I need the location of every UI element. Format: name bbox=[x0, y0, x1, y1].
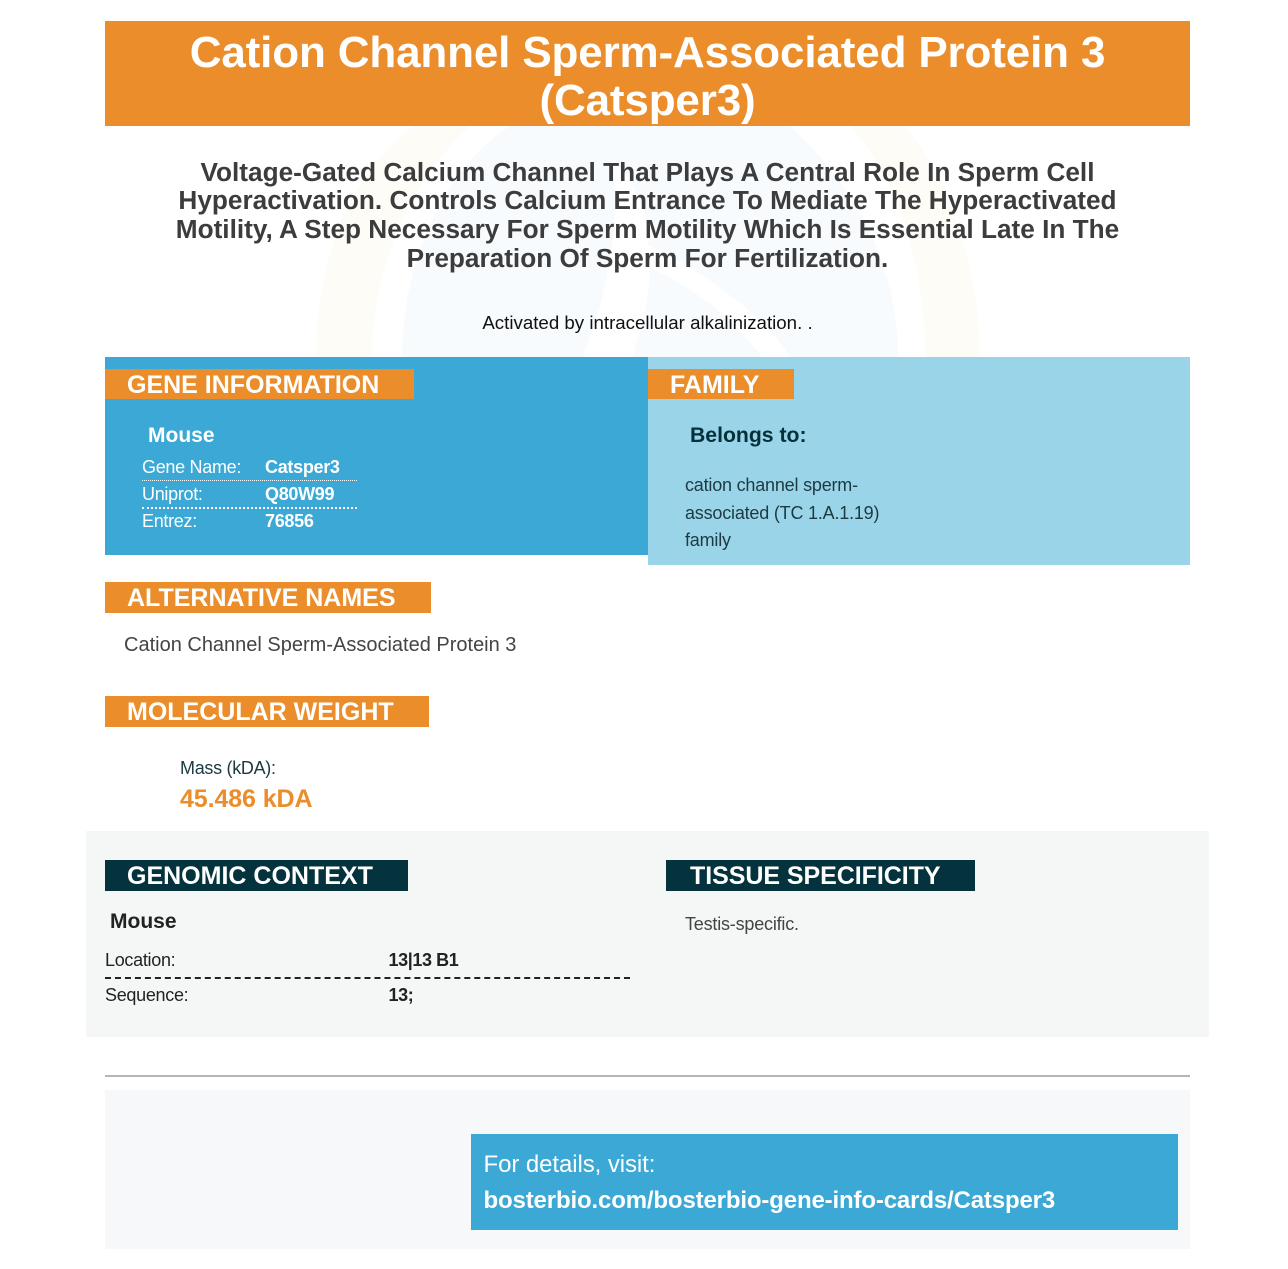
panel: gene information bbox=[105, 357, 648, 555]
genomic data table: Sequence: bbox=[105, 985, 188, 1005]
background watermark bbox=[0, 126, 1288, 357]
title banner: Cation Channel Sperm-Associated Protein 3 bbox=[190, 28, 1105, 76]
belongs to label: Belongs to: bbox=[690, 424, 807, 446]
subtitle description: Motility, A Step Necessary For Sperm Motility Which Is Essential Late In The bbox=[176, 214, 1119, 244]
gene data table: Catsper3 bbox=[265, 457, 340, 477]
heading: alternative names: ALTERNATIVE NAMES bbox=[127, 584, 396, 612]
panel: family bbox=[648, 357, 1190, 565]
title banner: (Catsper3) bbox=[539, 76, 756, 124]
panel: footer bbox=[105, 1090, 1190, 1249]
genomic data table: 13; bbox=[388, 985, 413, 1005]
gene data table: 76856 bbox=[265, 511, 314, 531]
family description: associated (TC 1.A.1.19) bbox=[685, 502, 879, 522]
subtitle description: Preparation Of Sperm For Fertilization. bbox=[407, 243, 888, 273]
genomic data table: Location: bbox=[105, 950, 175, 970]
family description: cation channel sperm- bbox=[685, 475, 858, 495]
mass label: Mass (kDA): bbox=[180, 758, 276, 778]
genomic data table bbox=[105, 950, 630, 1005]
genomic data table: 13|13 B1 bbox=[388, 950, 458, 970]
gene data table: Gene Name: bbox=[142, 457, 241, 477]
species label: Mouse bbox=[110, 910, 177, 932]
subtitle description bbox=[176, 157, 1119, 273]
heading: molecular weight: MOLECULAR WEIGHT bbox=[127, 698, 394, 726]
gene data table: Uniprot: bbox=[142, 484, 203, 504]
heading: gene information: GENE INFORMATION bbox=[127, 371, 379, 399]
family description: family bbox=[685, 530, 731, 550]
mass value: 45.486 kDA bbox=[180, 785, 312, 813]
callout: details link: bosterbio.com/bosterbio-gene-info-cards/Catsper3 bbox=[484, 1187, 1055, 1214]
title banner bbox=[105, 21, 1190, 126]
subtitle description: Voltage-Gated Calcium Channel That Plays A Central Role In Sperm Cell bbox=[201, 157, 1094, 187]
gene data table bbox=[142, 457, 357, 531]
tissue specificity text: Testis-specific. bbox=[685, 914, 799, 934]
callout: details link: For details, visit: bbox=[484, 1151, 655, 1178]
heading: tissue specificity: TISSUE SPECIFICITY bbox=[690, 862, 941, 890]
heading: family: FAMILY bbox=[670, 371, 759, 399]
species label: Mouse bbox=[148, 424, 215, 446]
alternative names text: Cation Channel Sperm-Associated Protein 3 bbox=[124, 634, 516, 656]
activation note: Activated by intracellular alkalinization. . bbox=[482, 312, 813, 333]
gene data table: Entrez: bbox=[142, 511, 197, 531]
heading: family bbox=[648, 369, 794, 399]
heading: genomic context: GENOMIC CONTEXT bbox=[127, 862, 373, 890]
panel: genomic context and tissue specificity bbox=[86, 831, 1209, 1037]
gene data table: Q80W99 bbox=[265, 484, 334, 504]
divider bbox=[105, 1075, 1190, 1077]
subtitle description: Hyperactivation. Controls Calcium Entrance To Mediate The Hyperactivated bbox=[178, 185, 1117, 215]
family description bbox=[685, 475, 879, 550]
callout: details link bbox=[471, 1134, 1178, 1230]
